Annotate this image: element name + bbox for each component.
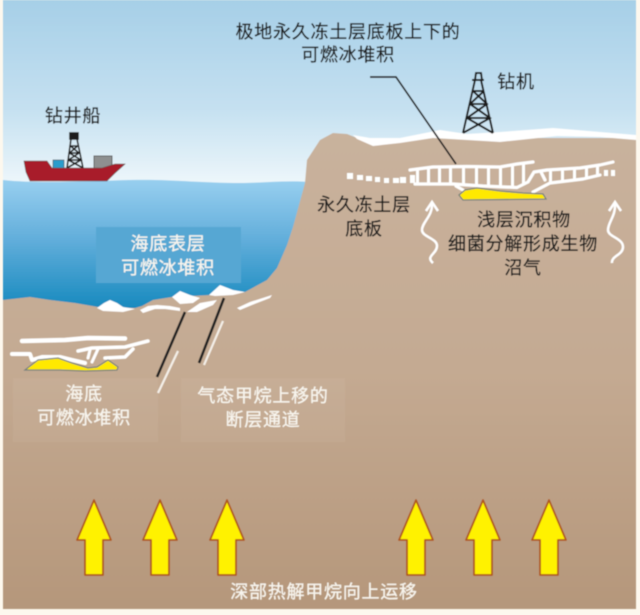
label: deep thermogenic methane migration: 深部热解甲烷向上运移 xyxy=(230,582,418,602)
fault line: right black xyxy=(199,298,224,363)
label: drilling ship: 钻井船 xyxy=(45,106,101,126)
label: shallow sediment biogas: 细菌分解形成生物 xyxy=(448,234,598,254)
label: permafrost base: 永久冻土层 xyxy=(317,195,411,215)
panel: seabed hydrate label: 可燃冰堆积 xyxy=(37,408,131,428)
panel: seabed surface label: 可燃冰堆积 xyxy=(121,258,215,278)
sea water xyxy=(3,180,310,312)
panel: fault channel label: 气态甲烷上移的 xyxy=(197,386,329,406)
label: permafrost base: 底板 xyxy=(345,219,383,239)
title: polar permafrost hydrate callout: 极地永久冻土层底板上下的 xyxy=(236,22,460,42)
sky background xyxy=(3,0,636,185)
fault line: left white xyxy=(158,351,178,393)
fault line: left black xyxy=(157,312,185,377)
label: shallow sediment biogas: 沼气 xyxy=(504,258,542,278)
wavy line: right methane xyxy=(608,202,623,263)
icon: ship deckhouse xyxy=(94,156,112,169)
label: shallow sediment biogas xyxy=(448,210,598,278)
permafrost hydrate zone xyxy=(347,162,615,200)
permafrost dashed squares xyxy=(347,164,615,186)
drilling ship xyxy=(24,133,125,181)
panel: fault channel label xyxy=(181,378,345,442)
label: drilling rig: 钻机 xyxy=(497,72,535,92)
panel: fault channel label: 断层通道 xyxy=(226,410,300,430)
icon: ship derrick xyxy=(67,133,83,168)
icon: drilling rig xyxy=(463,73,493,133)
panel: seabed surface label: 海底表层 xyxy=(130,234,206,254)
permafrost surface snow xyxy=(353,128,636,146)
icon: ship cabin xyxy=(53,160,64,169)
seabed and land ground xyxy=(3,133,636,609)
label: permafrost base xyxy=(317,195,411,239)
hydrate rails xyxy=(410,162,613,192)
icon: upward arrows (deep methane) xyxy=(77,500,566,575)
title: polar permafrost hydrate callout: 可燃冰堆积 xyxy=(301,45,395,65)
icon: red hull xyxy=(24,161,125,181)
panel: seabed hydrate label xyxy=(13,378,158,442)
fault line: right white xyxy=(204,321,223,365)
title: polar permafrost hydrate callout xyxy=(236,22,460,65)
label: shallow sediment biogas: 浅层沉积物 xyxy=(477,210,571,230)
panel: seabed hydrate label: 海底 xyxy=(65,384,103,404)
hydrate layers xyxy=(12,338,148,363)
callout leader line xyxy=(370,77,456,164)
wavy line: left methane xyxy=(422,202,438,263)
seabed surface hydrate deposits xyxy=(97,285,272,313)
deep seabed hydrate deposit xyxy=(12,338,148,371)
panel: seabed surface label xyxy=(96,227,241,283)
yellow gas hydrate lens xyxy=(459,188,546,200)
yellow gas hydrate lens xyxy=(25,358,118,371)
